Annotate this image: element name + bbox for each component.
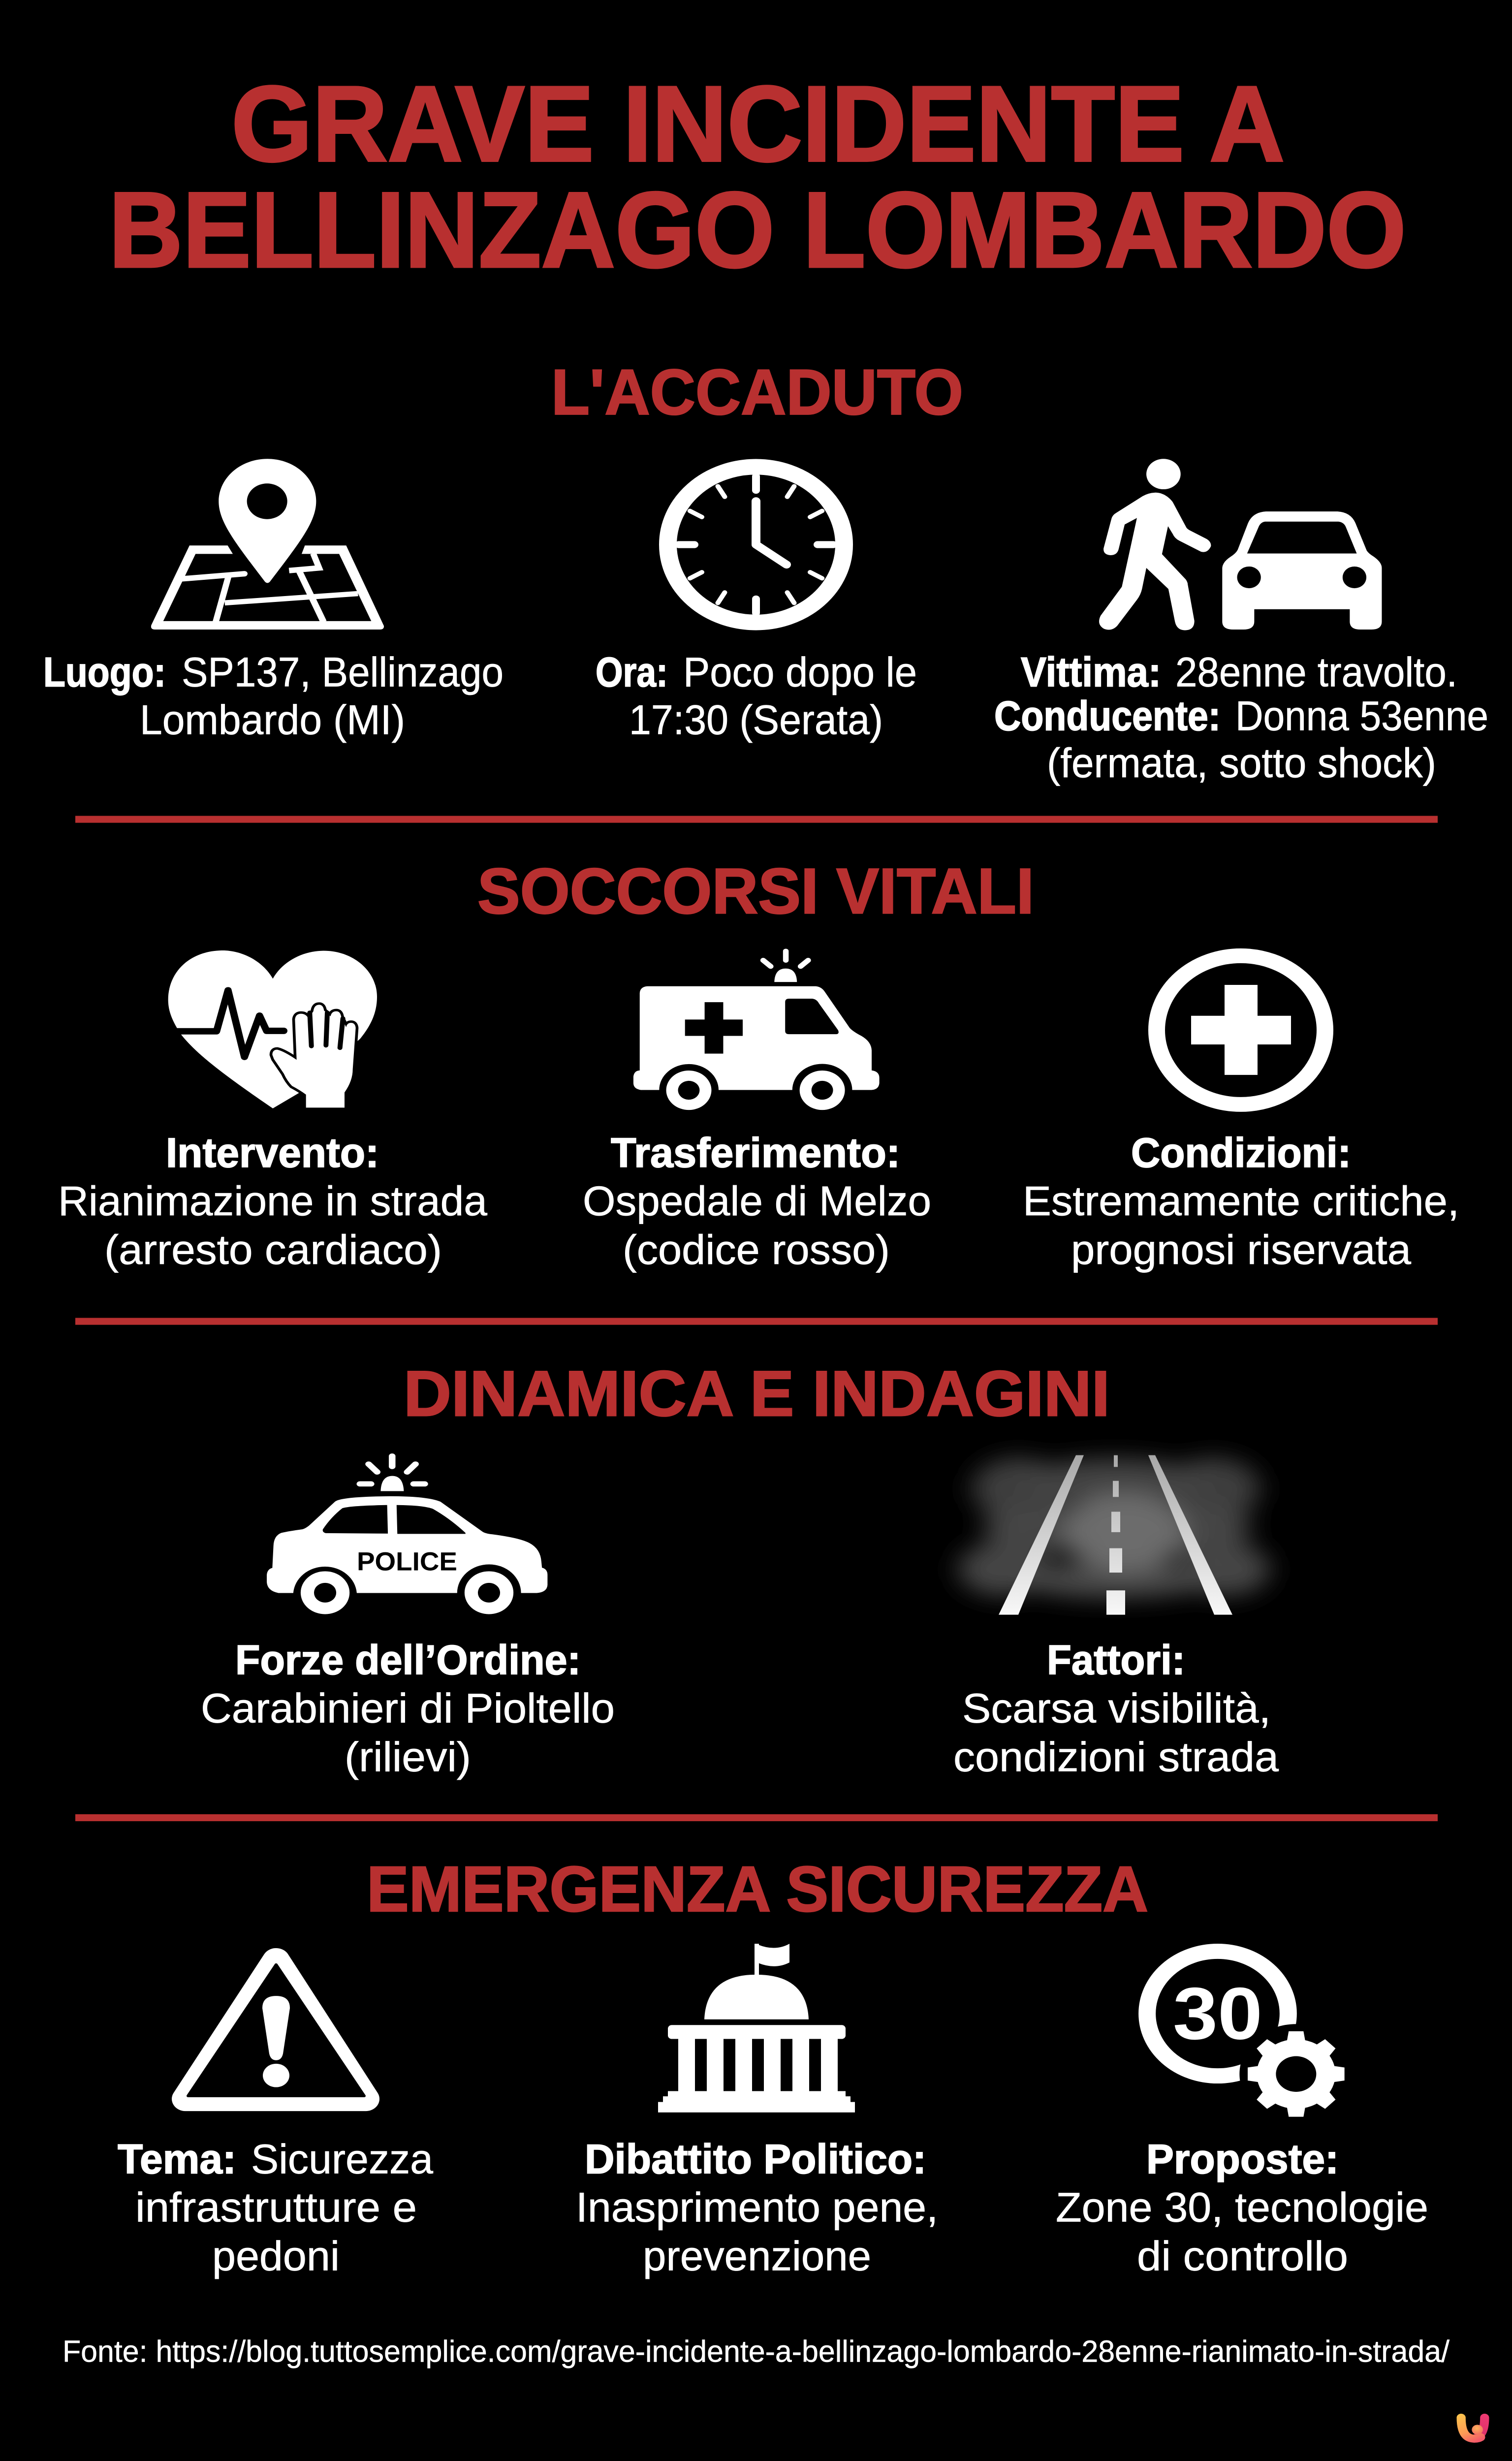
icon: medical cross in circle	[1157, 956, 1325, 1104]
text: luogo: Luogo:	[43, 649, 166, 695]
text: trasferimento: Ospedale di Melzo	[583, 1178, 931, 1225]
icon: brand logo	[1461, 2418, 1484, 2439]
text: luogo: Lombardo (MI)	[140, 697, 405, 743]
icon: warning triangle	[186, 1960, 366, 2099]
text: forze dell'ordine	[201, 1637, 615, 1780]
text: dibattito politico: Dibattito Politico:	[585, 2136, 926, 2182]
text: condizioni: Condizioni:	[1131, 1130, 1351, 1176]
text: ora	[596, 649, 917, 743]
icon: heart with pulse and hand	[168, 950, 377, 1108]
text: condizioni: prognosi riservata	[1071, 1227, 1412, 1273]
section heading: L'accaduto: L'ACCADUTO	[551, 356, 963, 428]
text: trasferimento: Trasferimento:	[611, 1130, 900, 1176]
icon: pedestrian and car	[1099, 459, 1382, 630]
text: dibattito politico	[576, 2136, 938, 2279]
text: fattori: condizioni strada	[953, 1734, 1279, 1780]
text: trasferimento	[583, 1130, 931, 1273]
text: ora: 17:30 (Serata)	[629, 697, 883, 743]
text: vittima e conducente	[994, 649, 1488, 787]
text: intervento: (arresto cardiaco)	[104, 1227, 442, 1273]
section heading: Soccorsi vitali: SOCCORSI VITALI	[477, 855, 1034, 927]
title: GRAVE INCIDENTE A	[231, 64, 1285, 184]
section heading: Emergenza sicurezza: EMERGENZA SICUREZZA	[367, 1853, 1148, 1925]
text: tema: Sicurezza	[251, 2136, 434, 2182]
text: proposte	[1056, 2136, 1428, 2279]
text: condizioni: Estremamente critiche,	[1023, 1178, 1459, 1225]
text: proposte: Proposte:	[1146, 2136, 1339, 2182]
text: tema	[118, 2136, 434, 2279]
text: forze dell'ordine: Forze dell’Ordine:	[235, 1637, 581, 1683]
text: intervento: Intervento:	[166, 1130, 379, 1176]
icon: ambulance	[633, 951, 880, 1110]
text: dibattito politico: prevenzione	[643, 2233, 871, 2279]
section heading: Dinamica e indagini: DINAMICA E INDAGINI	[404, 1357, 1110, 1429]
text: vittima e conducente: Conducente:	[994, 693, 1221, 739]
icon: map with location pin	[151, 459, 384, 630]
text: trasferimento: (codice rosso)	[623, 1227, 890, 1273]
text: forze dell'ordine: Carabinieri di Pioltello	[201, 1685, 615, 1732]
text: tema: pedoni	[212, 2233, 340, 2279]
text: forze dell'ordine: (rilievi)	[345, 1734, 471, 1780]
text: fattori: Fattori:	[1047, 1637, 1185, 1683]
text: vittima e conducente: Vittima:	[1021, 649, 1161, 695]
icon: speed limit 30 with gear: 30	[1173, 1972, 1262, 2054]
text: vittima e conducente: (fermata, sotto shock)	[1047, 740, 1436, 787]
icon: police car: POLICE	[357, 1547, 457, 1576]
icon: clock	[668, 467, 844, 623]
icon: police car	[267, 1456, 547, 1614]
icon: parliament building	[658, 1944, 855, 2113]
text: intervento: Rianimazione in strada	[58, 1178, 488, 1225]
text: luogo: SP137, Bellinzago	[182, 649, 504, 695]
title	[109, 64, 1406, 290]
text: condizioni	[1023, 1130, 1459, 1273]
text: tema: infrastrutture e	[135, 2184, 417, 2231]
text: tema: Tema:	[118, 2136, 236, 2182]
icon: foggy road	[958, 1455, 1270, 1615]
text: vittima e conducente: 28enne travolto.	[1175, 649, 1457, 695]
text: ora: Poco dopo le	[683, 649, 917, 695]
text: ora: Ora:	[596, 649, 668, 695]
text: proposte: di controllo	[1137, 2233, 1348, 2279]
text: proposte: Zone 30, tecnologie	[1056, 2184, 1428, 2231]
text: dibattito politico: Inasprimento pene,	[576, 2184, 938, 2231]
text: intervento	[58, 1130, 488, 1273]
icon: speed limit 30 with gear	[1147, 1951, 1353, 2124]
text: fattori	[953, 1637, 1279, 1780]
text: fattori: Scarsa visibilità,	[962, 1685, 1271, 1732]
text: luogo	[43, 649, 504, 743]
